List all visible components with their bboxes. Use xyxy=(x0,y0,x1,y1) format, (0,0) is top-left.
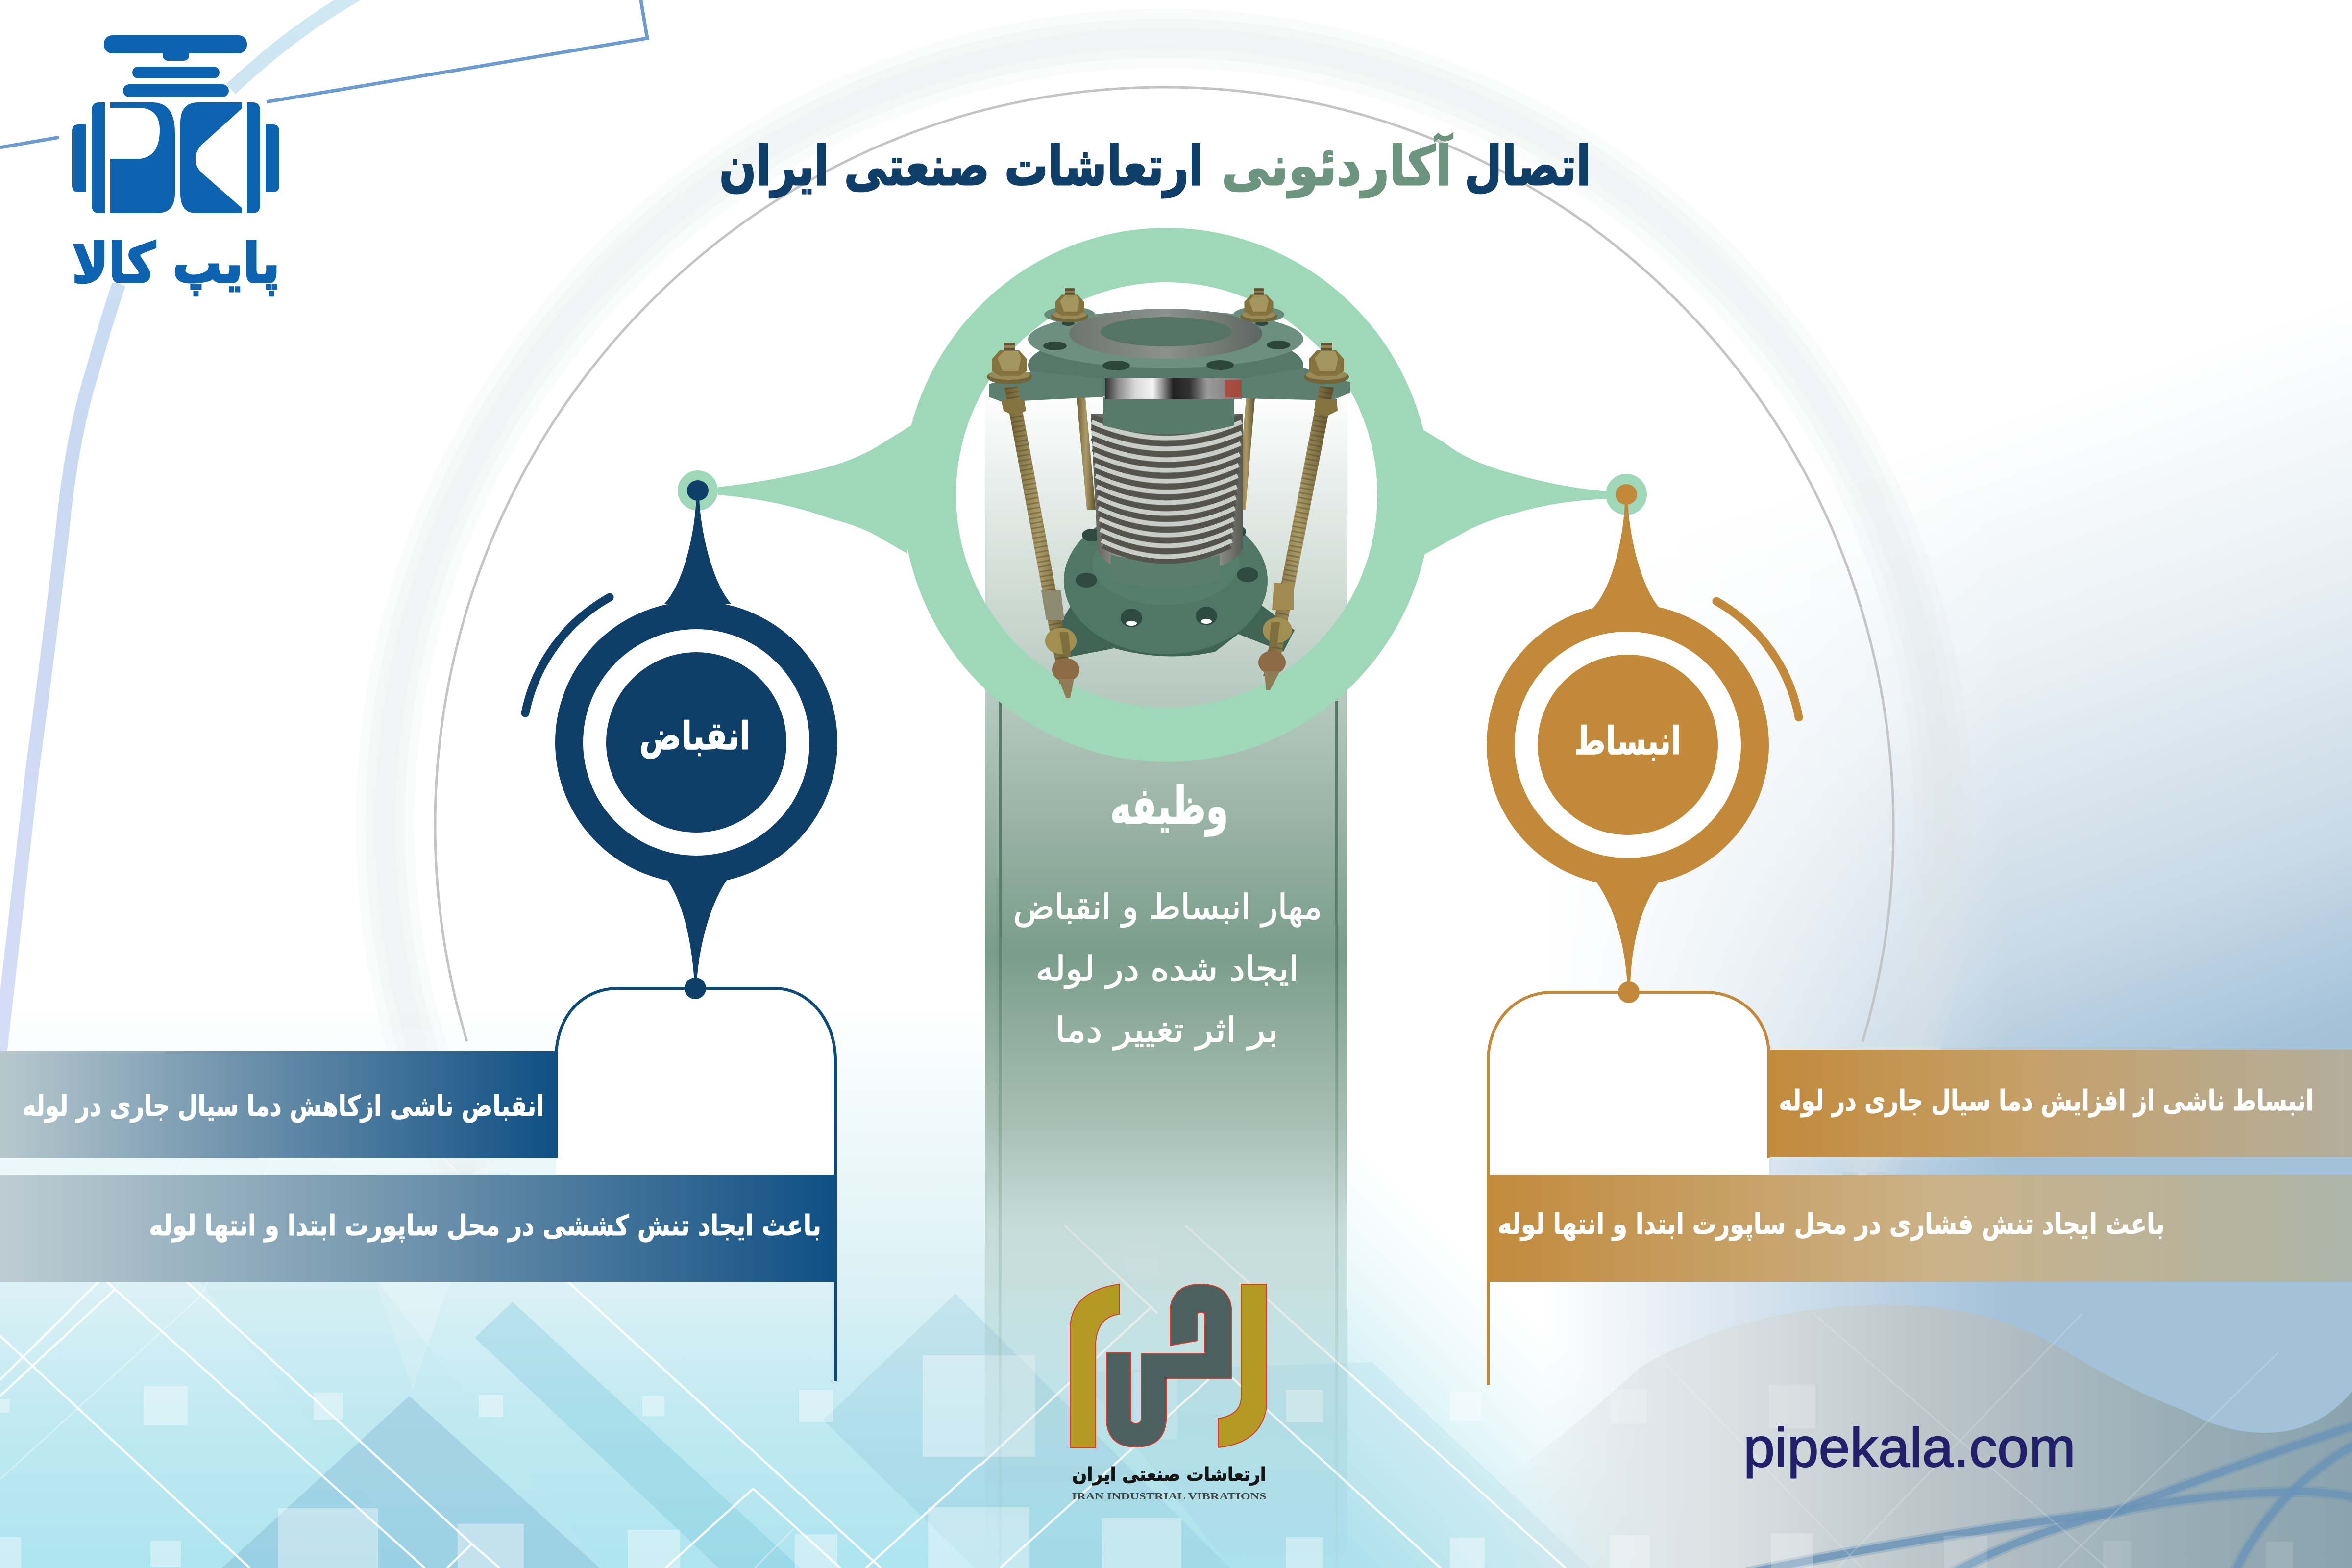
logo: Iran Industrial Vibrations: IRAN INDUSTRIAL VIBRATIONS xyxy=(1072,1491,1266,1502)
label: contraction: انقباض xyxy=(639,714,750,759)
corner polyline xyxy=(0,0,647,147)
text: function description: ایجاد شده در لوله xyxy=(1036,949,1298,989)
top flange xyxy=(989,307,1350,402)
bolts and nuts xyxy=(987,288,1349,698)
text: function heading: وظیفه xyxy=(1110,776,1228,836)
text: function description: بر اثر تغییر دما xyxy=(1055,1010,1278,1050)
logo: Iran Industrial Vibrations xyxy=(1070,1284,1267,1502)
title: آکاردئونی xyxy=(1222,133,1453,198)
node: expansion xyxy=(1500,474,1799,985)
bar: contraction cause: انقباض ناشی ازکاهش دما سیال جاری در لوله xyxy=(23,1089,544,1123)
title xyxy=(719,133,1591,198)
logo text: ارتعاشات صنعتی ایران xyxy=(1072,1464,1266,1485)
front rods xyxy=(1004,387,1334,684)
back rods xyxy=(1076,392,1255,510)
text: function description xyxy=(1013,887,1322,1050)
label: expansion: انبساط xyxy=(1574,719,1681,763)
panel: function column xyxy=(985,387,1348,1568)
title: ارتعاشات صنعتی ایران xyxy=(719,135,1203,198)
website url: pipekala.com xyxy=(1743,1417,2076,1478)
bottom flange xyxy=(1047,507,1295,659)
bar: contraction cause xyxy=(0,1051,558,1158)
node: contraction xyxy=(525,470,823,982)
chrome nameplate xyxy=(1105,378,1242,399)
bar: expansion effect xyxy=(1487,1175,2352,1282)
bar: contraction effect: باعث ایجاد تنش کششی در محل ساپورت ابتدا و انتها لوله xyxy=(149,1209,821,1243)
frame: contraction xyxy=(556,978,835,1381)
title: اتصال xyxy=(1465,135,1591,197)
bar: expansion effect: باعث ایجاد تنش فشاری در محل ساپورت ابتدا و انتها لوله xyxy=(1497,1207,2165,1241)
product ring with connectors xyxy=(718,228,1607,762)
frame: expansion xyxy=(1488,981,1769,1385)
logo: pipe kala xyxy=(59,35,280,296)
arch line xyxy=(435,87,1893,1042)
bar: expansion cause xyxy=(1768,1050,2352,1157)
product photo: bellows expansion joint xyxy=(987,288,1350,698)
logo wordmark: پایپ کالا xyxy=(72,232,280,296)
bar: contraction effect xyxy=(0,1175,837,1282)
bellows xyxy=(1091,397,1243,588)
text: function description: مهار انبساط و انقباض xyxy=(1013,887,1322,928)
